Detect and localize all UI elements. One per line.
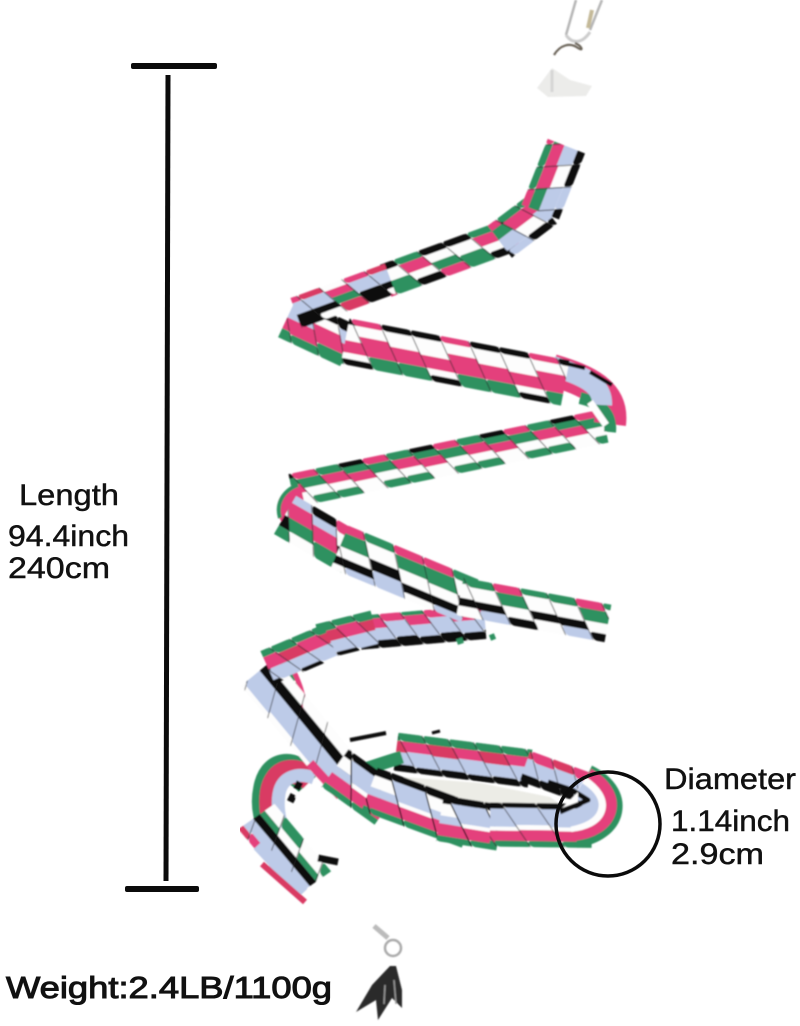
- label: diameter: 2.9cm: [671, 838, 764, 871]
- label: weight: Weight:2.4LB/1100g: [6, 970, 332, 1005]
- bottom bracket bar: [125, 886, 199, 892]
- rope segment: left green strand: [278, 662, 304, 715]
- rope spiral: [258, 146, 612, 902]
- icon: bottom hook: [356, 926, 402, 1020]
- rope segment: top strand: [296, 146, 566, 313]
- rope segment: fourth coil: [279, 485, 608, 623]
- label: length: [8, 479, 129, 585]
- icon: top carabiner hook: [537, 0, 602, 97]
- rope segment: back of bottom coil: [350, 731, 592, 815]
- vertical height line: [166, 75, 168, 881]
- rope segment: right turn: [552, 362, 612, 432]
- label: diameter: Diameter: [664, 763, 796, 796]
- diameter circle: [556, 772, 660, 876]
- rope segment: front bottom coil: [258, 672, 607, 832]
- label: length: 94.4inch: [8, 520, 129, 553]
- rope segment: third coil: [292, 426, 605, 491]
- label: length: 240cm: [8, 552, 110, 585]
- top bracket bar: [131, 63, 217, 69]
- height measure bracket: [125, 63, 217, 892]
- label: length: Length: [19, 479, 119, 512]
- rope segment: lower sweep: [268, 622, 495, 668]
- rope segment: tail arc and end: [258, 769, 338, 902]
- label: diameter: 1.14inch: [671, 805, 790, 838]
- label: diameter: [664, 763, 796, 871]
- rope segment: second coil: [288, 316, 565, 384]
